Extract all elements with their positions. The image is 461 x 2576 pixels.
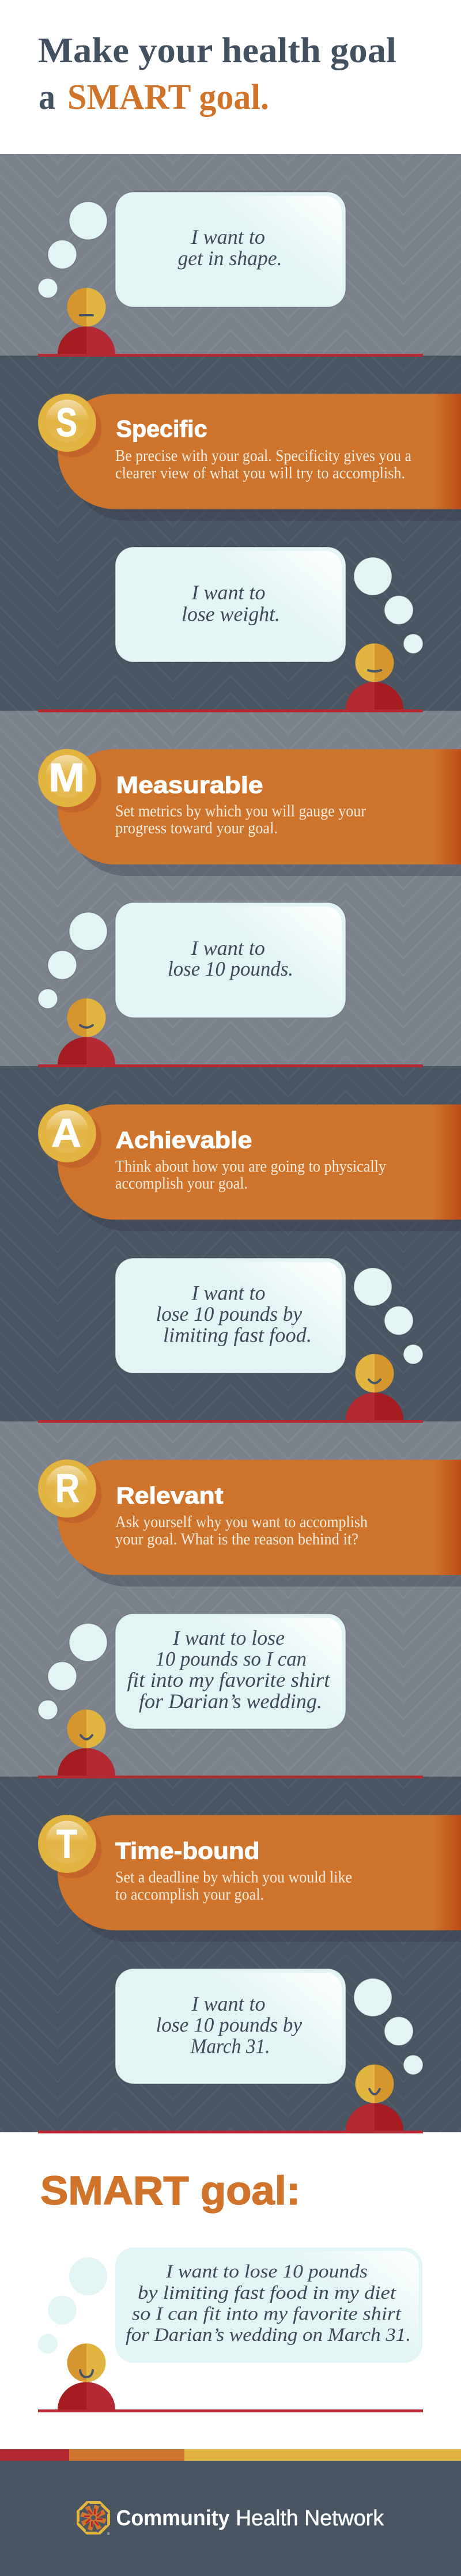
- thought bubble: lose weight: lose weight.: [182, 603, 280, 626]
- background band: intro: [0, 154, 461, 356]
- title: a: [39, 78, 55, 117]
- title: [38, 31, 396, 117]
- banner: relevant: your goal. What is the reason behind it?: [115, 1531, 358, 1548]
- title: Make your health goal: [38, 31, 396, 70]
- banner: relevant: [38, 1460, 461, 1587]
- banner: specific: clearer view of what you will try to accomplish.: [115, 464, 405, 482]
- background band: achievable: [0, 1066, 461, 1421]
- background band: measurable: [0, 711, 461, 1066]
- floor line: [38, 1420, 423, 1423]
- banner: measurable: Measurable: [116, 772, 263, 798]
- thought bubble: lose weight: [115, 547, 346, 662]
- banner: achievable: [38, 1104, 461, 1231]
- footer: [0, 2461, 461, 2576]
- thought bubble: limiting fast food: I want to: [191, 1282, 265, 1305]
- thought bubble: lose 10 pounds: lose 10 pounds.: [168, 957, 293, 980]
- panel: M measurable: [38, 749, 461, 1067]
- thought bubble: favorite shirt: [115, 1614, 346, 1729]
- floor line: [38, 709, 423, 712]
- banner: time-bound: [38, 1815, 461, 1942]
- banner: time-bound: to accomplish your goal.: [115, 1886, 264, 1904]
- floor line: [38, 2409, 423, 2412]
- title: SMART goal.: [67, 78, 269, 117]
- person with thought dots: [38, 2257, 115, 2409]
- thought bubble: limiting fast food: lose 10 pounds by: [156, 1302, 302, 1325]
- banner: measurable: progress toward your goal.: [115, 819, 278, 837]
- background band: relevant: [0, 1421, 461, 1777]
- thought bubble: get in shape: I want to: [190, 225, 265, 248]
- thought bubble: favorite shirt: fit into my favorite shirt: [127, 1668, 331, 1691]
- banner: achievable: accomplish your goal.: [115, 1174, 248, 1193]
- person with thought dots: [38, 912, 115, 1064]
- banner: relevant: R: [55, 1465, 80, 1510]
- panel: T time-bound: [38, 1815, 461, 2133]
- panel: intro thought: [38, 192, 423, 357]
- banner: time-bound: Set a deadline by which you would like: [115, 1868, 352, 1887]
- colour stripes: [0, 2449, 461, 2461]
- floor line: [38, 1064, 423, 1067]
- thought bubble: March 31: I want to: [191, 1992, 265, 2015]
- thought bubble: get in shape: get in shape.: [177, 247, 282, 270]
- thought bubble: favorite shirt: I want to lose: [172, 1626, 285, 1649]
- banner: achievable: A: [51, 1111, 81, 1155]
- banner: time-bound: Time-bound: [115, 1837, 259, 1864]
- floor line: [38, 2131, 423, 2133]
- thought bubble: get in shape: [115, 192, 346, 307]
- panel: R relevant: [38, 1460, 461, 1778]
- thought bubble: lose 10 pounds: I want to: [190, 936, 265, 960]
- banner: measurable: Set metrics by which you will gauge your: [115, 802, 366, 821]
- thought bubble: favorite shirt: 10 pounds so I can: [156, 1647, 307, 1670]
- banner: specific: S: [56, 400, 77, 445]
- thought bubble: March 31: March 31.: [190, 2034, 270, 2057]
- logo wordmark: Health Network: [236, 2506, 384, 2530]
- thought bubble: limiting fast food: [115, 1258, 346, 1373]
- logo wordmark: [107, 2506, 384, 2536]
- icon: Community Health Network logo: [75, 2499, 112, 2536]
- person with thought dots: [38, 1623, 115, 1776]
- person with thought dots: [38, 202, 115, 354]
- panel: SMART goal summary: [38, 2168, 423, 2412]
- banner: measurable: [38, 749, 461, 876]
- thought bubble: lose 10 pounds: [115, 902, 346, 1018]
- floor line: [38, 1776, 423, 1778]
- banner: measurable: M: [48, 755, 85, 800]
- thought bubble: full goal: by limiting fast food in my diet: [138, 2283, 396, 2303]
- panel: S specific: [38, 394, 461, 712]
- banner: specific: Be precise with your goal. Specificity gives you a: [115, 447, 412, 465]
- thought bubble: full goal: so I can fit into my favorite shirt: [132, 2304, 402, 2325]
- logo wordmark: ®: [107, 2532, 110, 2536]
- person with thought dots: [346, 1978, 423, 2131]
- banner: specific: [38, 394, 461, 521]
- banner: time-bound: T: [56, 1821, 77, 1866]
- thought bubble: March 31: [115, 1969, 346, 2084]
- floor line: [38, 354, 423, 357]
- person with thought dots: [346, 1268, 423, 1420]
- logo wordmark: Community: [116, 2506, 229, 2530]
- banner: achievable: Think about how you are going to physically: [115, 1158, 386, 1176]
- thought bubble: limiting fast food: limiting fast food.: [163, 1323, 312, 1346]
- banner: relevant: Relevant: [116, 1482, 224, 1509]
- thought bubble: March 31: lose 10 pounds by: [156, 2014, 302, 2037]
- person with thought dots: [346, 557, 423, 709]
- background band: time-bound: [0, 1777, 461, 2132]
- banner: achievable: Achievable: [115, 1127, 252, 1153]
- thought bubble: full goal: [115, 2248, 422, 2363]
- panel: A achievable: [38, 1104, 461, 1423]
- thought bubble: favorite shirt: for Darian’s wedding.: [139, 1690, 322, 1713]
- thought bubble: full goal: for Darian’s wedding on March 31.: [126, 2325, 411, 2345]
- banner: specific: Specific: [116, 416, 207, 442]
- heading: SMART goal: SMART goal:: [40, 2168, 300, 2213]
- thought bubble: lose weight: I want to: [191, 581, 265, 604]
- background band: specific: [0, 356, 461, 711]
- banner: relevant: Ask yourself why you want to accomplish: [115, 1513, 368, 1531]
- thought bubble: full goal: I want to lose 10 pounds: [165, 2261, 368, 2282]
